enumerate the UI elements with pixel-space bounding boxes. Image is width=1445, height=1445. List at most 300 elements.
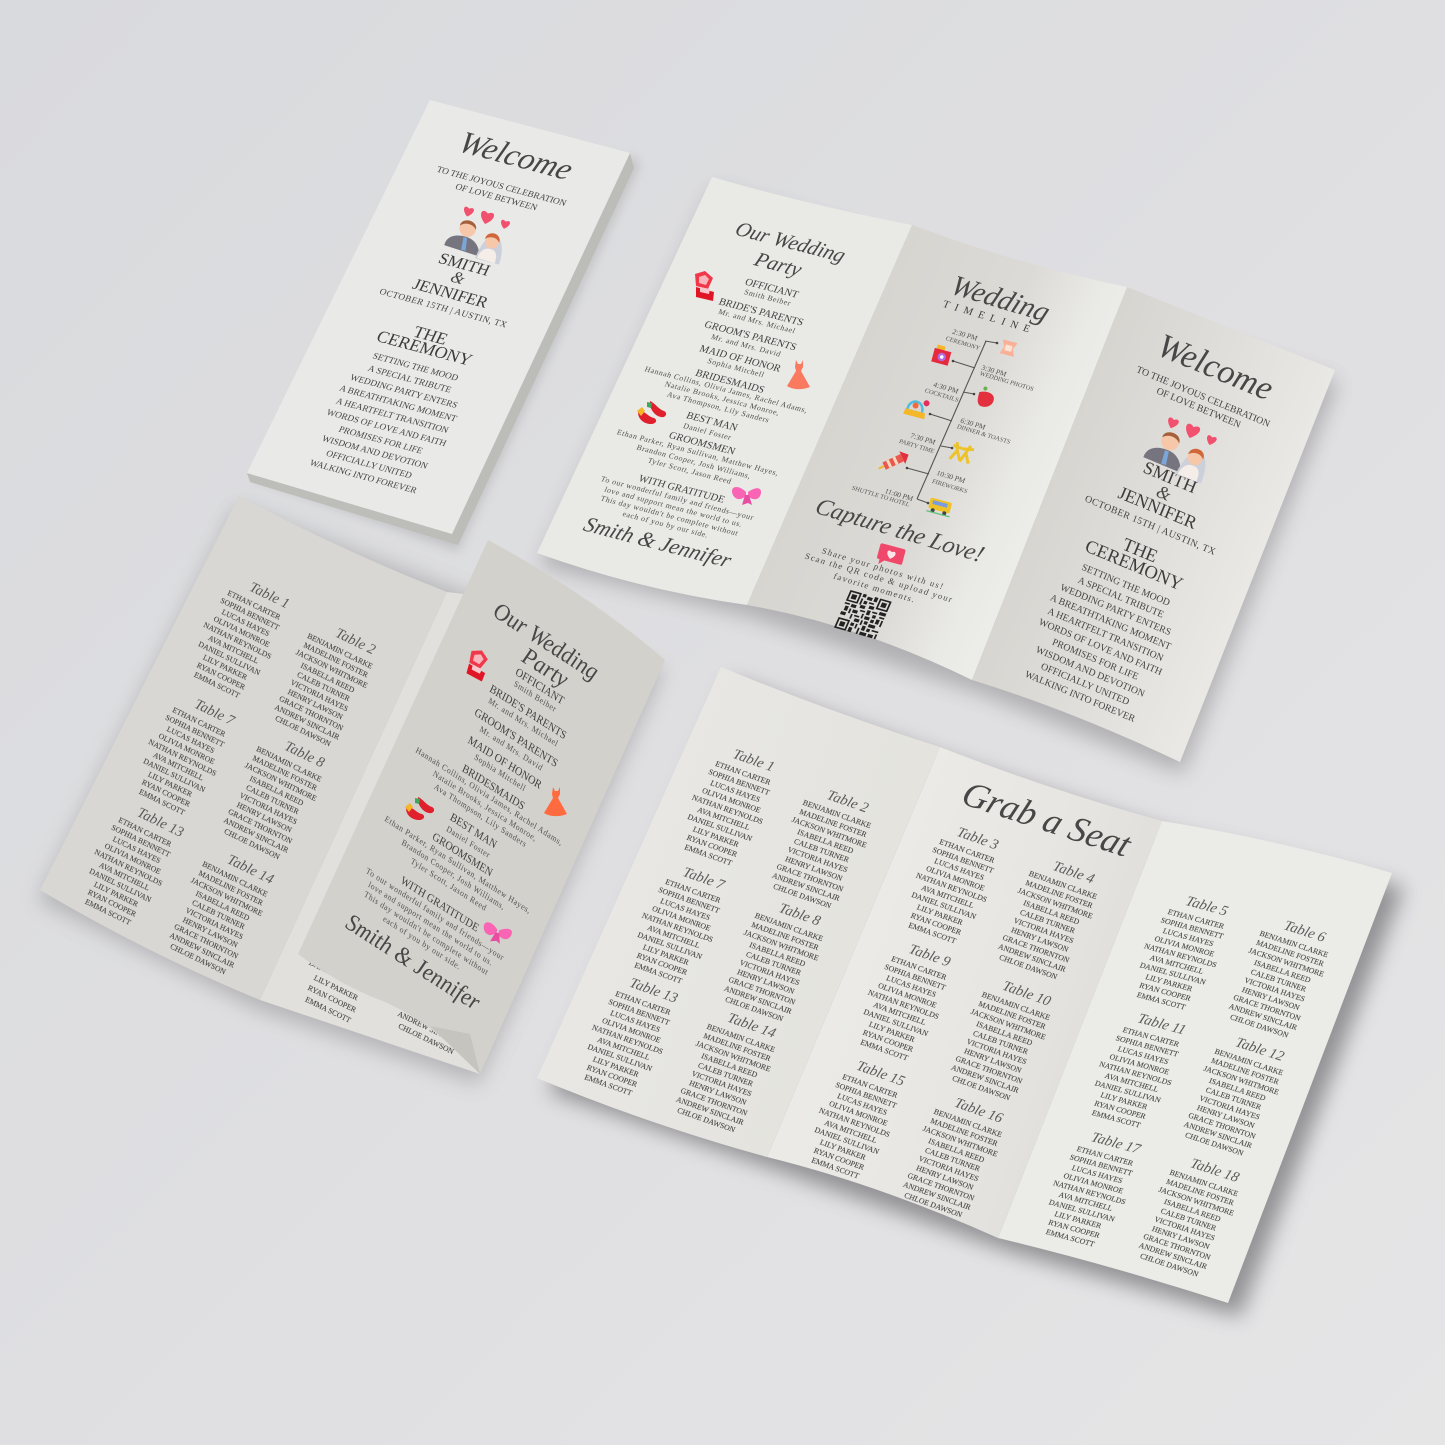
flap text: wedding party: each of you by our side. — [382, 914, 462, 972]
flap text: wedding party: To our wonderful family and friends—your — [364, 866, 506, 963]
names showing under the flap: LILY PARKER — [313, 973, 360, 1003]
table 9: AVA MITCHELL — [872, 1000, 928, 1027]
table 11: EMMA SCOTT — [1090, 1108, 1142, 1130]
table 8 — [715, 893, 835, 1026]
table 3: RYAN COOPER — [909, 911, 964, 937]
table 12: Table 12 — [1233, 1035, 1286, 1065]
table 6: VICTORIA HAYES — [1243, 976, 1306, 1003]
timeline labels: 11:00 PM — [883, 486, 915, 503]
panel: closed brochure front — [247, 100, 640, 552]
capture the love section: Capture the Love! — [811, 494, 988, 568]
left panel: wedding party text: Hannah Collins, Olivia James, Rachel Adams, — [643, 365, 809, 415]
table 14: GRACE THORNTON — [679, 1086, 749, 1118]
flap text: wedding party: MAID OF HONOR — [466, 734, 543, 792]
timeline labels: WEDDING PHOTOS — [978, 370, 1035, 393]
table 2 — [763, 780, 883, 913]
table 8: GRACE THORNTON — [227, 807, 294, 846]
table 4: JACKSON WHITMORE — [1016, 886, 1094, 921]
table 12: ISABELLA REED — [1208, 1076, 1267, 1103]
table 14: HENRY LAWSON — [688, 1078, 748, 1107]
table 2 — [266, 613, 385, 752]
table 6: HENRY LAWSON — [1241, 985, 1301, 1012]
table 13: ETHAN CARTER — [614, 989, 673, 1017]
capture the love section: Scan the QR code & upload your — [803, 551, 955, 604]
timeline labels: SHUTTLE TO HOTEL — [850, 485, 911, 508]
table 2: JACKSON WHITMORE — [790, 815, 868, 850]
table 2: CALEB TURNER — [296, 670, 352, 704]
brochure text: welcome and ceremony: OCTOBER 15TH | AUSTIN, TX — [378, 286, 509, 330]
table 17: SOPHIA BENNETT — [1068, 1153, 1134, 1178]
table 2: JACKSON WHITMORE — [294, 648, 369, 690]
table 7: AVA MITCHELL — [646, 923, 702, 950]
table 10: Table 10 — [1000, 978, 1054, 1010]
table 8: VICTORIA HAYES — [238, 791, 299, 826]
table 8: HENRY LAWSON — [235, 800, 294, 835]
table 14: MADELINE FOSTER — [702, 1031, 773, 1063]
table 14: CHLOE DAWSON — [169, 942, 228, 977]
flap text: wedding party: This day wouldn't be complete without — [363, 889, 490, 978]
table 12: GRACE THORNTON — [1187, 1111, 1257, 1141]
table 10: JACKSON WHITMORE — [969, 1007, 1047, 1042]
right panel: welcome and ceremony: SETTING THE MOOD — [1080, 562, 1171, 609]
table 3: ETHAN CARTER — [938, 837, 997, 865]
table 13: Table 13 — [135, 805, 186, 841]
table 14: CHLOE DAWSON — [676, 1106, 737, 1134]
table 15: ETHAN CARTER — [841, 1072, 900, 1100]
table 18: Table 18 — [1188, 1156, 1242, 1186]
icon: bride and groom with hearts — [1142, 413, 1219, 483]
table 7: OLIVIA MONROE — [157, 731, 216, 766]
table 5: Table 5 — [1183, 894, 1230, 919]
table 18: HENRY LAWSON — [1151, 1224, 1211, 1251]
left panel: wedding party text: each of you by our side. — [621, 509, 710, 540]
table 4: VICTORIA HAYES — [1012, 916, 1075, 945]
icon: dinner table — [903, 395, 930, 420]
left panel: wedding party text: Tyler Scott, Jason Reed — [646, 456, 733, 486]
timeline labels: PARTY TIME — [898, 438, 936, 455]
table 7: NATHAN REYNOLDS — [147, 737, 218, 778]
left panel: wedding party text — [571, 210, 879, 574]
table 15: EMMA SCOTT — [810, 1156, 861, 1181]
panel: open tri-fold program — [537, 177, 1338, 774]
left panel: wedding party text: Daniel Foster — [682, 421, 733, 442]
brochure text: welcome and ceremony: JENNIFER — [410, 275, 492, 312]
table 4: ISABELLA REED — [1022, 898, 1081, 926]
table 4: CALEB TURNER — [1019, 908, 1077, 936]
table 13: DANIEL SULLIVAN — [88, 866, 153, 904]
left panel: wedding party text: BRIDE'S PARENTS — [717, 297, 805, 329]
brochure text: welcome and ceremony: SETTING THE MOOD — [371, 351, 461, 383]
brochure text: welcome and ceremony: THE — [410, 323, 451, 348]
table 3: LUCAS HAYES — [933, 856, 986, 882]
brochure text: welcome and ceremony: OFFICIALLY UNITED — [325, 448, 414, 480]
flap text: wedding party: Mr. and Mrs. David — [478, 724, 545, 773]
seating table 1: Table 1 — [247, 579, 292, 612]
table 14: CALEB TURNER — [697, 1061, 755, 1089]
table 17: Table 17 — [1089, 1130, 1144, 1158]
table 17: LUCAS HAYES — [1070, 1163, 1124, 1185]
table 3: AVA MITCHELL — [920, 883, 976, 910]
table 2: GRACE THORNTON — [278, 694, 345, 733]
table 11: LILY PARKER — [1099, 1090, 1150, 1111]
capture the love section — [790, 494, 988, 617]
table 8: ANDREW SINCLAIR — [222, 816, 291, 855]
table 17: AVA MITCHELL — [1057, 1190, 1114, 1213]
table 2: CALEB TURNER — [793, 837, 851, 865]
seating table 1 — [182, 568, 297, 705]
table 17: LILY PARKER — [1053, 1209, 1104, 1230]
icon: bow — [480, 921, 513, 946]
table 16: CALEB TURNER — [924, 1146, 982, 1174]
table 11 — [1079, 1006, 1196, 1133]
table 17: EMMA SCOTT — [1044, 1227, 1096, 1249]
timeline labels: 3:30 PM — [980, 363, 1009, 379]
panel: half-open gate-fold with flap — [38, 496, 665, 1084]
table 10: MADELINE FOSTER — [977, 999, 1048, 1031]
icon: ring box — [695, 271, 714, 301]
icon: firework rocket — [876, 448, 912, 475]
table 5: SOPHIA BENNETT — [1159, 916, 1225, 941]
flap text: wedding party: Smith & Jennifer — [342, 907, 485, 1016]
table 12: VICTORIA HAYES — [1198, 1094, 1261, 1121]
seating table 1: EMMA SCOTT — [193, 670, 242, 700]
table 13: LILY PARKER — [592, 1055, 641, 1079]
table 3: DANIEL SULLIVAN — [910, 890, 978, 921]
table 3: OLIVIA MONROE — [925, 864, 986, 893]
table 6 — [1220, 911, 1341, 1042]
table 7 — [621, 857, 737, 990]
table 13: DANIEL SULLIVAN — [586, 1042, 654, 1073]
flap text: wedding party: Tyler Scott, Jason Reed — [409, 856, 488, 913]
table 17: OLIVIA MONROE — [1062, 1171, 1125, 1196]
table 2: Table 2 — [333, 625, 378, 658]
table 16: HENRY LAWSON — [915, 1163, 975, 1192]
brochure text: welcome and ceremony: WALKING INTO FOREVER — [308, 458, 420, 495]
table 1 — [671, 739, 787, 872]
table 2: BENJAMIN CLARKE — [306, 631, 374, 671]
flap text: wedding party: Hannah Collins, Olivia James, Rachel Adams, — [414, 745, 564, 848]
table 1: NATHAN REYNOLDS — [691, 793, 764, 826]
table 16: VICTORIA HAYES — [917, 1154, 980, 1183]
table 10: CHLOE DAWSON — [951, 1074, 1012, 1102]
table 8: MADELINE FOSTER — [750, 920, 821, 952]
table 2: ISABELLA REED — [796, 827, 855, 855]
left panel: wedding party text: love and support mean the world to us. — [603, 485, 744, 529]
flap text: wedding party: Daniel Foster — [445, 824, 492, 860]
table 2: MADELINE FOSTER — [302, 640, 370, 680]
table 7: SOPHIA BENNETT — [164, 713, 226, 749]
table 6: GRACE THORNTON — [1232, 993, 1302, 1023]
table 11: NATHAN REYNOLDS — [1098, 1060, 1173, 1087]
table 17: DANIEL SULLIVAN — [1047, 1198, 1117, 1224]
table 14: JACKSON WHITMORE — [189, 876, 264, 918]
flap text: wedding party: Our Wedding — [490, 595, 603, 686]
table 2: VICTORIA HAYES — [786, 845, 849, 874]
table 2: ANDREW SINCLAIR — [771, 871, 842, 903]
flap text: wedding party: love and support mean the world to us. — [367, 879, 495, 968]
table 1: RYAN COOPER — [685, 833, 740, 859]
flap text: wedding party: GROOM'S PARENTS — [472, 707, 560, 770]
table 13: OLIVIA MONROE — [601, 1016, 662, 1045]
brochure text: welcome and ceremony: WORDS OF LOVE AND FAITH — [325, 407, 449, 448]
table 9: LILY PARKER — [868, 1020, 917, 1044]
table 7: DANIEL SULLIVAN — [636, 930, 704, 961]
table 13: SOPHIA BENNETT — [110, 823, 172, 859]
table 3 — [895, 817, 1011, 950]
icon: ring box — [464, 648, 491, 682]
table 8 — [215, 726, 334, 865]
table 13 — [73, 795, 188, 932]
table 7: SOPHIA BENNETT — [657, 885, 721, 915]
table 16: ISABELLA REED — [927, 1136, 986, 1164]
flap text: wedding party: BRIDE'S PARENTS — [488, 683, 568, 743]
table 8: HENRY LAWSON — [736, 967, 796, 996]
table 11: LUCAS HAYES — [1116, 1044, 1170, 1066]
table 13: OLIVIA MONROE — [103, 841, 162, 876]
table 7: AVA MITCHELL — [152, 750, 205, 783]
table 17: RYAN COOPER — [1047, 1218, 1102, 1240]
table 18: ANDREW SINCLAIR — [1138, 1241, 1209, 1271]
table 7: OLIVIA MONROE — [651, 904, 712, 933]
brochure text: welcome and ceremony: WEDDING PARTY ENTERS — [349, 372, 460, 410]
left panel: wedding party text: Ethan Parker, Ryan Sullivan, Matthew Hayes, — [615, 428, 781, 478]
middle panel: wedding timeline title: TIMELINE — [941, 299, 1037, 337]
table 12: CHLOE DAWSON — [1184, 1130, 1245, 1158]
icon: dress — [787, 360, 810, 389]
right panel: welcome and ceremony: WISDOM AND DEVOTION — [1034, 645, 1146, 700]
table 7: NATHAN REYNOLDS — [641, 911, 714, 944]
table 10 — [942, 972, 1062, 1105]
table 8: MADELINE FOSTER — [251, 753, 319, 793]
icon: heart speech bubble — [875, 543, 906, 570]
icon: ceremony scroll — [999, 339, 1018, 357]
table 14: Table 14 — [725, 1010, 778, 1042]
table 18: MADELINE FOSTER — [1165, 1177, 1236, 1207]
table 9: EMMA SCOTT — [859, 1038, 910, 1063]
table 14: BENJAMIN CLARKE — [201, 859, 269, 899]
table 14: Table 14 — [225, 852, 276, 888]
table 11: SOPHIA BENNETT — [1114, 1034, 1180, 1059]
right panel: welcome and ceremony: OCTOBER 15TH | AUSTIN, TX — [1083, 494, 1217, 558]
table 7: EMMA SCOTT — [138, 787, 187, 817]
table 5: RYAN COOPER — [1138, 981, 1193, 1003]
table 7: Table 7 — [192, 696, 237, 730]
table 8: ISABELLA REED — [748, 940, 807, 968]
table 13: ETHAN CARTER — [117, 815, 174, 849]
table 14: CALEB TURNER — [191, 898, 247, 932]
timeline labels: 6:30 PM — [959, 416, 988, 432]
timeline labels: 2:30 PM — [951, 327, 980, 343]
brochure text: welcome and ceremony: TO THE JOYOUS CELEBRATION — [435, 164, 569, 208]
right panel: welcome and ceremony: TO THE JOYOUS CELEBRATION — [1135, 364, 1271, 430]
left panel: wedding party text: Natalie Brooks, Jessica Monroe, — [663, 380, 781, 417]
table 14: ANDREW SINCLAIR — [675, 1095, 746, 1127]
right panel: welcome and ceremony: OF LOVE BETWEEN — [1155, 386, 1242, 431]
table 7 — [127, 685, 242, 822]
table 10: VICTORIA HAYES — [965, 1037, 1028, 1066]
panel: open four-column seating chart — [537, 667, 1404, 1317]
table 7: LUCAS HAYES — [659, 896, 712, 922]
table 10: ANDREW SINCLAIR — [950, 1063, 1021, 1095]
flap text: wedding party: Ava Thompson, Lily Sanders — [433, 781, 528, 849]
timeline chart — [850, 327, 1035, 517]
table 10: CALEB TURNER — [972, 1029, 1030, 1057]
capture the love section: favorite moments. — [832, 571, 918, 605]
table 9: LUCAS HAYES — [885, 973, 938, 999]
flap text: wedding party: Natalie Brooks, Jessica Monroe, — [431, 768, 538, 843]
left panel: wedding party text: BRIDESMAIDS — [693, 368, 766, 396]
right panel: welcome and ceremony — [1012, 323, 1288, 730]
table 14: VICTORIA HAYES — [184, 906, 245, 941]
title: grab a seat: Grab a Seat — [956, 774, 1138, 865]
right panel: welcome and ceremony: A SPECIAL TRIBUTE — [1076, 575, 1165, 621]
table 4: Table 4 — [1050, 858, 1097, 887]
right panel: welcome and ceremony: WALKING INTO FOREVER — [1023, 669, 1137, 725]
table 1: SOPHIA BENNETT — [707, 767, 771, 797]
table 16: BENJAMIN CLARKE — [933, 1107, 1004, 1139]
table 12: BENJAMIN CLARKE — [1213, 1047, 1285, 1077]
seating table 1: AVA MITCHELL — [207, 633, 260, 666]
right panel: welcome and ceremony: WORDS OF LOVE AND FAITH — [1037, 617, 1164, 678]
table 2: CHLOE DAWSON — [772, 882, 833, 910]
table 8: VICTORIA HAYES — [738, 958, 801, 987]
table 7: DANIEL SULLIVAN — [142, 756, 207, 794]
table 15: NATHAN REYNOLDS — [818, 1106, 891, 1139]
flap text: wedding party: Brandon Cooper, Josh Williams, — [400, 837, 507, 912]
timeline labels: CEREMONY — [944, 335, 981, 352]
table 14 — [161, 841, 280, 980]
brochure text: welcome and ceremony: Welcome — [453, 124, 579, 186]
table 8: Table 8 — [282, 738, 327, 772]
table 6: JACKSON WHITMORE — [1247, 946, 1326, 979]
table 1: AVA MITCHELL — [696, 805, 752, 832]
table 8: CHLOE DAWSON — [724, 995, 785, 1023]
left panel: wedding party text: Sophia Mitchell — [706, 356, 766, 379]
table 14: BENJAMIN CLARKE — [706, 1022, 777, 1054]
table 2: ANDREW SINCLAIR — [273, 703, 342, 742]
table 2: Table 2 — [824, 787, 871, 816]
table 13: NATHAN REYNOLDS — [93, 847, 164, 888]
flap text: wedding party: Smith Beiber — [512, 679, 558, 714]
table 13: NATHAN REYNOLDS — [591, 1023, 664, 1056]
table 14: ANDREW SINCLAIR — [168, 931, 237, 970]
names showing under the flap: ANDREW SINCLAIR — [396, 1009, 465, 1049]
brochure text: welcome and ceremony: A SPECIAL TRIBUTE — [366, 363, 454, 395]
table 9: ETHAN CARTER — [890, 954, 949, 982]
table 4: GRACE THORNTON — [1001, 933, 1071, 965]
table 1: OLIVIA MONROE — [701, 786, 762, 815]
right panel: welcome and ceremony: CEREMONY — [1082, 537, 1185, 595]
table 6: MADELINE FOSTER — [1255, 938, 1326, 968]
table 1: ETHAN CARTER — [714, 759, 773, 787]
table 13: SOPHIA BENNETT — [607, 997, 671, 1027]
table 2: HENRY LAWSON — [784, 854, 844, 883]
table 5: LUCAS HAYES — [1161, 926, 1215, 948]
icon: cocktail — [976, 385, 997, 409]
table 1: Table 1 — [730, 746, 777, 775]
table 18: VICTORIA HAYES — [1153, 1215, 1216, 1242]
table 9: NATHAN REYNOLDS — [867, 988, 940, 1021]
seating table 1: NATHAN REYNOLDS — [202, 620, 273, 661]
table 5: DANIEL SULLIVAN — [1138, 961, 1208, 987]
right panel: welcome and ceremony: THE — [1119, 535, 1160, 567]
table 17 — [1033, 1125, 1150, 1252]
table 1: LILY PARKER — [692, 825, 741, 849]
table 4: BENJAMIN CLARKE — [1028, 869, 1099, 901]
seating table 1: DANIEL SULLIVAN — [197, 639, 262, 677]
right panel: welcome and ceremony: Welcome — [1152, 327, 1278, 408]
table 14: JACKSON WHITMORE — [694, 1039, 772, 1074]
table 6: CALEB TURNER — [1249, 967, 1309, 994]
brochure text: welcome and ceremony: & — [447, 267, 469, 288]
QR code — [834, 590, 892, 639]
timeline labels: FIREWORKS — [931, 478, 969, 495]
names showing under the flap — [304, 958, 465, 1056]
table 8: CALEB TURNER — [245, 783, 301, 817]
table 2: HENRY LAWSON — [286, 687, 345, 722]
icon: bow — [732, 487, 761, 505]
timeline labels — [850, 327, 1035, 508]
flap text: wedding party: WITH GRATITUDE — [399, 875, 480, 935]
table 4: HENRY LAWSON — [1010, 925, 1070, 954]
table 3: SOPHIA BENNETT — [931, 845, 995, 875]
table 18: ISABELLA REED — [1163, 1197, 1222, 1224]
table 8: CHLOE DAWSON — [223, 827, 282, 862]
table 13: AVA MITCHELL — [596, 1035, 652, 1062]
left panel: wedding party text: BEST MAN — [684, 411, 740, 434]
left panel: wedding party text: Ava Thompson, Lily Sanders — [666, 390, 771, 424]
right panel: welcome and ceremony: WEDDING PARTY ENTERS — [1059, 582, 1173, 638]
table 7: RYAN COOPER — [140, 777, 192, 809]
table 2: ISABELLA REED — [299, 661, 356, 695]
table 1: EMMA SCOTT — [683, 843, 734, 868]
table 5: OLIVIA MONROE — [1153, 934, 1216, 959]
right panel: welcome and ceremony: A HEARTFELT TRANSITION — [1046, 606, 1165, 664]
flap text: wedding party: Mr. and Mrs. Michael — [487, 695, 560, 749]
table 7: Table 7 — [680, 864, 727, 894]
names showing under the flap: RYAN COOPER — [306, 983, 358, 1015]
timeline labels: COCKTAILS — [924, 387, 960, 404]
flap text: wedding party: Ethan Parker, Ryan Sullivan, Matthew Hayes, — [383, 814, 532, 916]
table 16: MADELINE FOSTER — [929, 1116, 1000, 1148]
table 5: ETHAN CARTER — [1166, 907, 1226, 931]
table 4: CHLOE DAWSON — [998, 953, 1059, 981]
seating table 1: RYAN COOPER — [195, 660, 247, 692]
icon: shuttle bus — [926, 497, 953, 517]
brochure text: welcome and ceremony: SMITH — [436, 249, 493, 279]
table 15: AVA MITCHELL — [823, 1118, 879, 1145]
timeline labels: DINNER & TOASTS — [956, 423, 1012, 446]
table 15: RYAN COOPER — [812, 1146, 867, 1172]
table 5: EMMA SCOTT — [1135, 990, 1187, 1012]
table 3: LILY PARKER — [916, 903, 965, 927]
table 11: AVA MITCHELL — [1103, 1071, 1160, 1094]
left panel: wedding party text: MAID OF HONOR — [698, 344, 783, 375]
left panel: wedding party text: To our wonderful family and friends—your — [599, 474, 756, 522]
flap text: wedding party: GROOMSMEN — [430, 831, 495, 880]
timeline labels: 10:30 PM — [935, 468, 967, 485]
icon: camera — [931, 344, 952, 366]
seating table 1: OLIVIA MONROE — [212, 614, 271, 649]
table 6: BENJAMIN CLARKE — [1258, 929, 1330, 959]
left panel: wedding party text: Smith & Jennifer — [580, 512, 736, 572]
flap text: wedding party: BEST MAN — [448, 812, 499, 852]
table 5: LILY PARKER — [1144, 972, 1195, 993]
brochure text: welcome and ceremony: OF LOVE BETWEEN — [454, 182, 540, 212]
seating table 1: ETHAN CARTER — [226, 588, 283, 622]
table 5: NATHAN REYNOLDS — [1143, 942, 1218, 969]
table 16: JACKSON WHITMORE — [921, 1124, 999, 1159]
